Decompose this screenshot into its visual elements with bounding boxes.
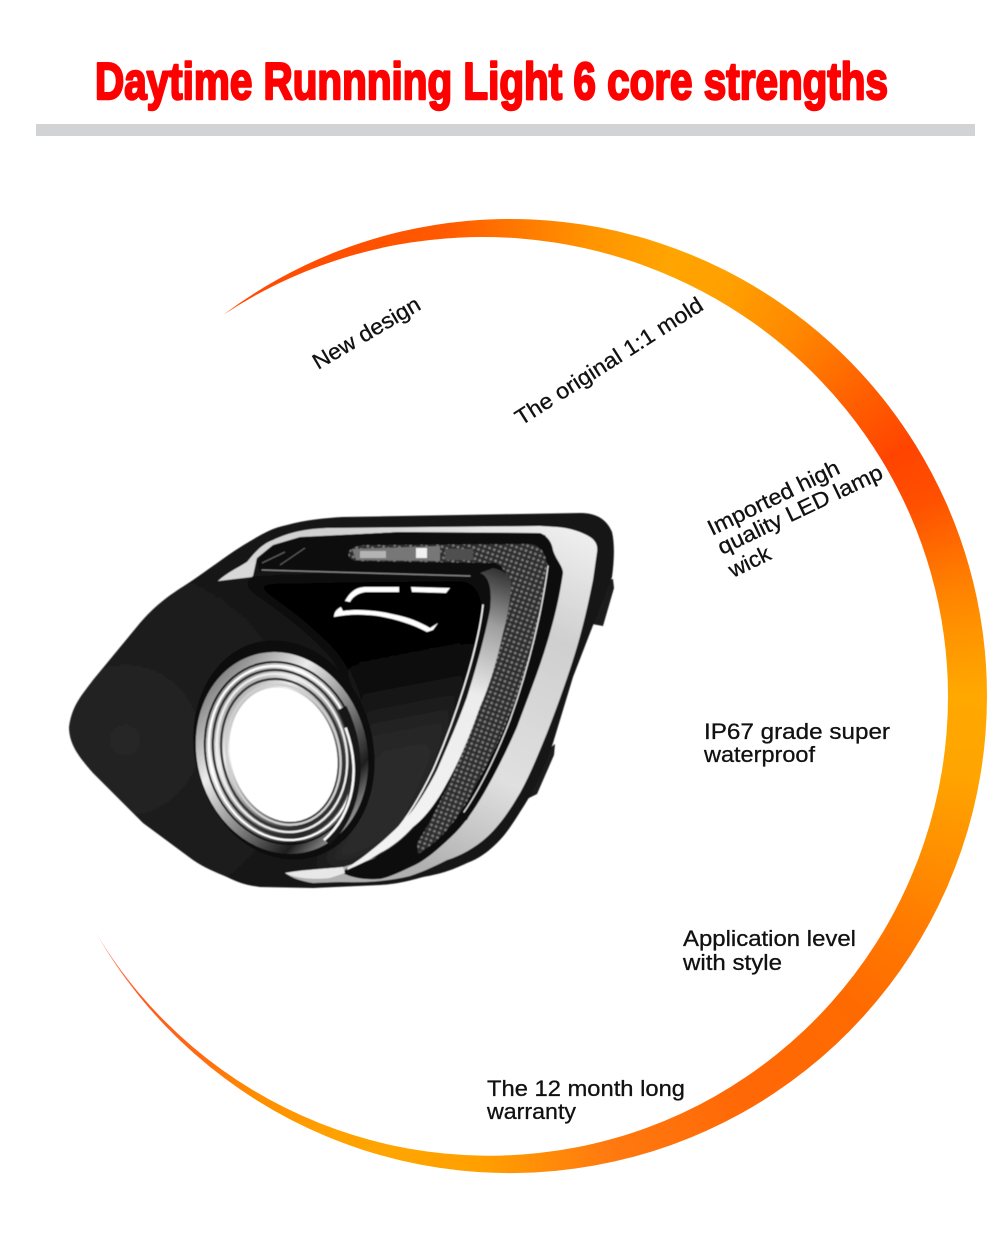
mounting tabs <box>525 579 614 800</box>
label: application level: Application level <box>683 926 856 951</box>
top chrome tip <box>218 562 256 581</box>
label: waterproof: waterproof <box>703 742 816 767</box>
inner panel shading <box>240 578 485 865</box>
grey divider bar <box>36 124 975 136</box>
label: waterproof: IP67 grade super <box>704 719 890 744</box>
bottom chrome tip <box>285 867 345 879</box>
label: application level <box>682 926 856 975</box>
label: warranty: warranty <box>486 1099 576 1124</box>
thin chrome lines <box>262 566 548 833</box>
LED dot lens <box>348 544 547 854</box>
black lens housing <box>257 532 563 879</box>
inner chrome band <box>347 568 511 870</box>
label: LED wick <box>703 455 887 583</box>
product photo: LED fog lamp bezel <box>68 512 615 889</box>
outer silver trim <box>218 526 597 883</box>
orange crescent arc <box>96 219 987 1174</box>
LED bright strip <box>352 546 440 561</box>
label: LED wick: Imported high <box>703 455 844 540</box>
ring highlights <box>292 707 377 842</box>
label: waterproof <box>703 719 890 767</box>
label: original mold: The original 1:1 mold <box>510 292 708 430</box>
label: LED wick: wick <box>723 540 776 583</box>
housing glints <box>262 548 305 565</box>
label: warranty <box>486 1076 685 1124</box>
black bezel <box>69 513 614 888</box>
vent slots <box>334 587 450 632</box>
fog lamp chrome ring <box>173 632 391 874</box>
fog lamp halo <box>169 620 399 880</box>
label: LED wick: quality LED lamp <box>713 459 887 560</box>
lens opening <box>215 675 352 834</box>
label: application level: with style <box>682 950 782 975</box>
LED chip highlights <box>360 548 473 560</box>
label: new design: New design <box>308 291 425 374</box>
label: warranty: The 12 month long <box>487 1076 685 1101</box>
